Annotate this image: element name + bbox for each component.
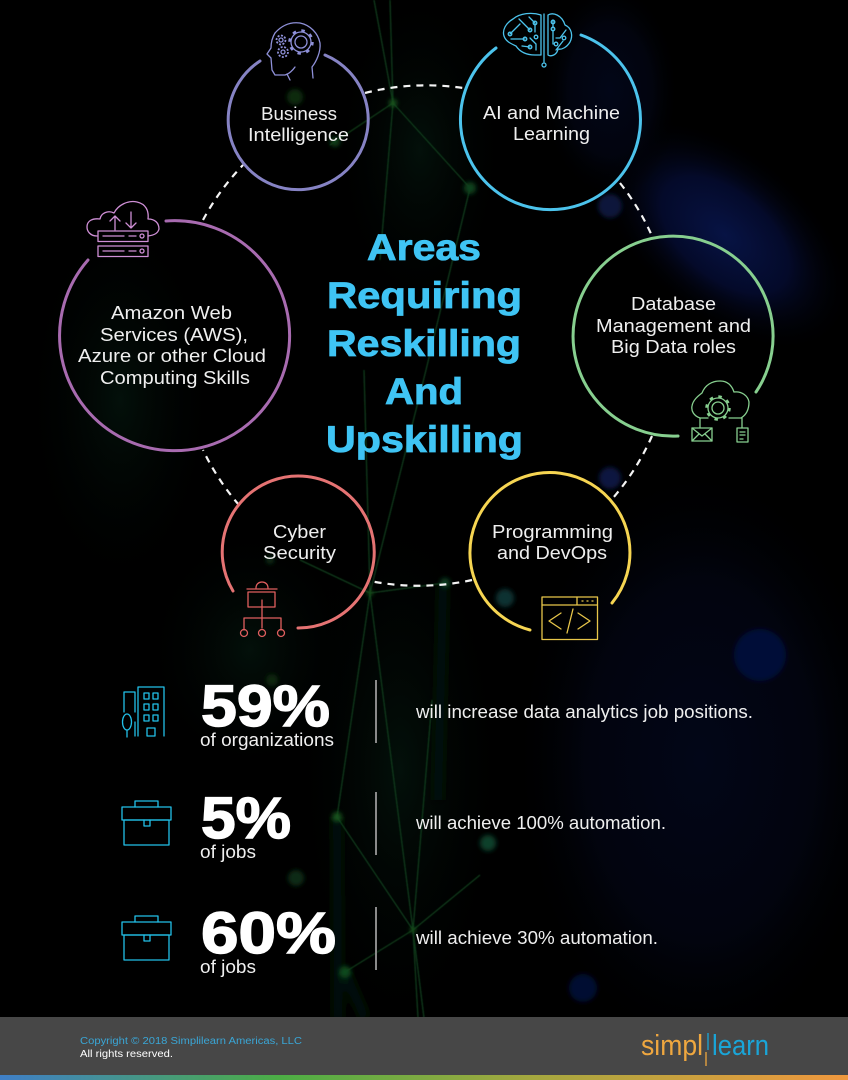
copyright text: Copyright © 2018 Simplilearn Americas, LLC <box>80 1036 302 1047</box>
circle: AI and Machine Learning: Learning <box>513 124 590 144</box>
icon: briefcase <box>122 801 171 845</box>
circle: Amazon Web Services: Amazon Web <box>111 303 232 323</box>
stat number: 59% <box>201 674 330 739</box>
title <box>326 227 523 460</box>
circle: Cyber Security <box>222 476 374 636</box>
dashed connectors <box>203 85 652 586</box>
stat caption: of organizations <box>200 730 334 750</box>
circle: AI and Machine Learning: AI and Machine <box>483 103 620 123</box>
icon: office building <box>122 687 164 737</box>
circle: Cyber Security: Security <box>263 543 336 563</box>
circle: Database Management and Big Data roles: Big Data roles <box>611 337 736 357</box>
title: Upskilling <box>326 419 523 460</box>
stat: 60% of jobs <box>122 901 658 977</box>
logo: learn <box>712 1030 769 1062</box>
title: Areas <box>367 227 481 268</box>
title: Requiring <box>327 275 522 316</box>
stat description: will achieve 100% automation. <box>415 813 666 833</box>
footer <box>0 1017 848 1080</box>
icon: cloud servers <box>87 202 159 256</box>
circle: Business Intelligence: Business <box>261 104 337 124</box>
circle: Amazon Web Services <box>60 202 290 451</box>
circle: Amazon Web Services: Services (AWS), <box>100 325 248 345</box>
circle: Programming and DevOps <box>470 473 630 640</box>
circle: Database Management and Big Data roles <box>573 236 773 442</box>
icon: brain circuit <box>503 13 572 67</box>
circle: Cyber Security: Cyber <box>273 522 326 542</box>
stat: 5% of jobs <box>122 786 666 862</box>
circle: Amazon Web Services: Computing Skills <box>100 368 250 388</box>
title: Reskilling <box>327 323 521 364</box>
stat caption: of jobs <box>200 957 256 977</box>
divider <box>375 792 377 855</box>
icon: code window <box>542 597 598 640</box>
icon: briefcase <box>122 916 171 960</box>
circle: Business Intelligence <box>228 23 368 190</box>
circle: Database Management and Big Data roles: Management and <box>596 316 751 336</box>
circle: Business Intelligence: Intelligence <box>248 125 349 145</box>
title: And <box>385 371 463 412</box>
rights text: All rights reserved. <box>80 1049 173 1060</box>
circle: AI and Machine Learning <box>460 13 640 210</box>
icon: head with gears <box>267 23 320 80</box>
stat: 59% of organizations <box>122 674 753 750</box>
stat description: will increase data analytics job positions. <box>415 702 753 722</box>
circle: Programming and DevOps: and DevOps <box>497 543 607 563</box>
divider <box>375 907 377 970</box>
stat number: 60% <box>201 901 336 966</box>
divider <box>375 680 377 743</box>
icon: security network <box>240 582 284 636</box>
icon: cloud gear <box>692 381 749 442</box>
logo: simpl <box>641 1030 703 1062</box>
stat number: 5% <box>201 786 291 851</box>
circle: Database Management and Big Data roles: Database <box>631 294 716 314</box>
circle: Programming and DevOps: Programming <box>492 522 613 542</box>
logo <box>641 1030 769 1066</box>
stat caption: of jobs <box>200 842 256 862</box>
circle: Amazon Web Services: Azure or other Cloud <box>78 346 266 366</box>
stat description: will achieve 30% automation. <box>415 928 658 948</box>
